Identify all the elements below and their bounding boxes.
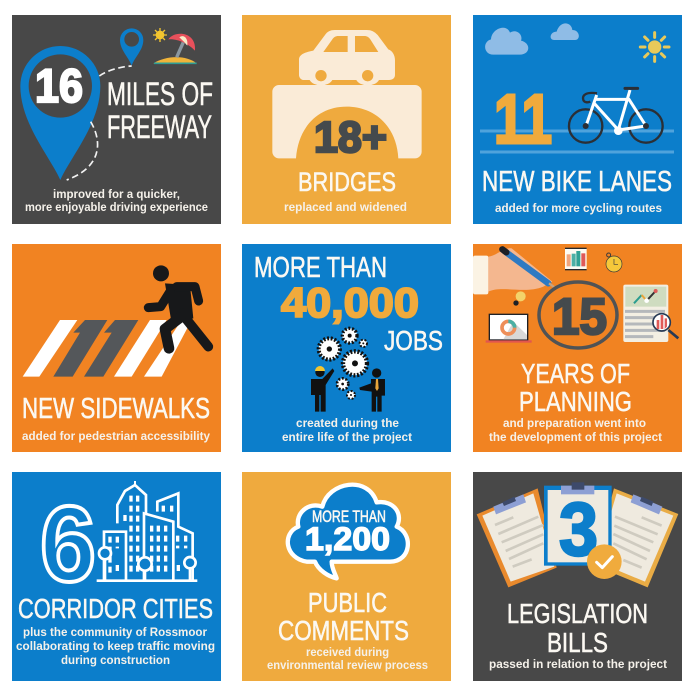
caption: replaced and widened — [284, 202, 407, 214]
caption — [25, 189, 208, 214]
icon: worker with helmet — [311, 366, 334, 412]
panel: 6 corridor cities — [12, 472, 221, 681]
heading: miles of freeway — [107, 76, 213, 145]
caption: passed in relation to the project — [489, 659, 667, 671]
icon: city skyline — [97, 481, 197, 581]
icon: beach umbrella and sun — [153, 28, 197, 63]
number: 3: 3 — [559, 487, 598, 571]
icon: light bulb — [513, 291, 526, 306]
panel: 40,000 jobs — [242, 244, 451, 452]
panel: 15 years of planning — [473, 244, 682, 452]
number: 15 in hand-drawn circle: 15 — [552, 288, 607, 345]
icon: car on bridge — [272, 30, 422, 158]
heading: years of planning: YEARS OF — [521, 358, 630, 389]
icon: stopwatch — [606, 253, 622, 272]
heading: bridges: BRIDGES — [298, 167, 396, 197]
heading: public comments: COMMENTS — [278, 615, 409, 646]
caption: added for pedestrian accessibility — [22, 431, 211, 443]
heading: legislation bills — [507, 598, 648, 658]
caption — [282, 418, 412, 444]
icon: walking person — [148, 265, 208, 348]
label: jobs: JOBS — [384, 325, 443, 356]
caption: the development of this project — [489, 432, 662, 444]
icon: speech cloud — [288, 485, 408, 578]
icon: right clipboard — [593, 488, 678, 587]
number: 1,200: 1,200 — [305, 521, 390, 557]
panel: 1,200 public comments — [242, 472, 451, 681]
number: outlined 6: 6 — [40, 483, 96, 604]
heading: miles of freeway: FREEWAY — [107, 109, 212, 145]
heading: years of planning — [519, 358, 632, 417]
caption: received during — [306, 647, 389, 659]
icon: gears — [319, 328, 367, 399]
number: 18+: 18+ — [314, 113, 387, 162]
icon: centre clipboard — [544, 482, 612, 566]
heading: corridor cities: CORRIDOR CITIES — [18, 593, 213, 624]
panel: 11 new bike lanes — [473, 15, 682, 224]
icon: bar chart card — [565, 248, 587, 270]
caption: plus the community of Rossmoor — [23, 627, 208, 639]
lane lines — [480, 130, 674, 154]
heading: years of planning: PLANNING — [519, 386, 632, 417]
icon: bicycle — [569, 88, 663, 143]
caption — [16, 627, 215, 667]
heading: legislation bills: BILLS — [547, 627, 608, 658]
heading: new sidewalks: NEW SIDEWALKS — [22, 393, 210, 425]
dashed route lines — [67, 66, 132, 180]
caption: and preparation went into — [503, 418, 646, 430]
number: 40,000: 40,000 — [281, 279, 419, 326]
icon: small map pin — [120, 28, 143, 66]
panel: 11 new sidewalks — [12, 244, 221, 452]
caption: improved for a quicker, — [53, 189, 180, 201]
caption: collaborating to keep traffic moving — [16, 641, 215, 653]
icon: trees — [99, 547, 196, 580]
icon: laptop with donut chart — [486, 314, 532, 343]
icon: businessman — [359, 368, 385, 412]
number: 11: 11 — [494, 80, 552, 158]
caption: created during the — [296, 418, 399, 430]
heading: more than: MORE THAN — [254, 252, 387, 284]
number: 15 in hand-drawn circle — [539, 282, 617, 348]
icon: check badge — [587, 544, 622, 579]
caption: entire life of the project — [282, 432, 412, 444]
heading: miles of freeway: MILES OF — [107, 76, 213, 112]
number: 16: 16 — [35, 59, 83, 112]
icon: hand holding pen — [473, 248, 555, 294]
icon: left clipboard — [477, 488, 557, 587]
icon: large map pin — [20, 46, 100, 180]
caption: environmental review process — [267, 660, 428, 672]
heading: public comments: PUBLIC — [308, 587, 387, 618]
heading: legislation bills: LEGISLATION — [507, 598, 648, 629]
heading: public comments — [278, 587, 409, 646]
panel: 16 miles of freeway — [12, 15, 221, 224]
caption — [489, 418, 662, 444]
panel: 18+ bridges — [242, 15, 451, 224]
crosswalk stripes forming number 11 — [23, 320, 192, 377]
caption: during construction — [61, 655, 170, 667]
text: more than: MORE THAN — [312, 507, 386, 526]
caption — [267, 647, 428, 672]
icon: clouds and sun — [485, 23, 669, 61]
icon: report with magnifier — [623, 285, 678, 342]
panel: 3 legislation bills — [473, 472, 682, 681]
caption: more enjoyable driving experience — [25, 202, 208, 214]
caption: added for more cycling routes — [495, 203, 662, 215]
